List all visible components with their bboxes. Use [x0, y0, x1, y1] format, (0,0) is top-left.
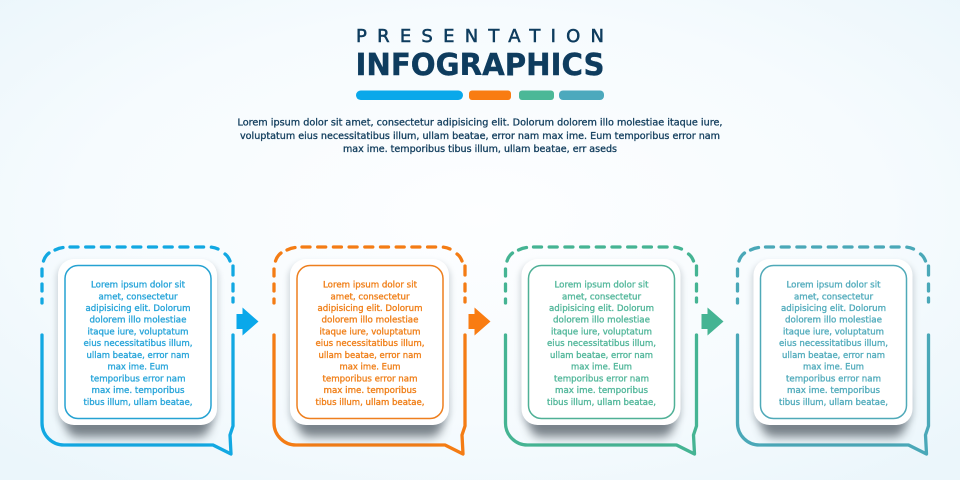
card shadow	[752, 262, 914, 437]
card text: Lorem ipsum dolor sit	[323, 280, 417, 290]
card text: temporibus error nam	[554, 374, 649, 384]
card shadow	[56, 262, 219, 437]
card text: max ime. Eum	[571, 363, 632, 373]
inner outline	[528, 266, 674, 418]
arrow: step 3 to 4	[702, 308, 724, 336]
card text: itaque iure, voluptatum	[88, 328, 188, 338]
white card	[58, 259, 217, 425]
panel: step 3 green	[506, 247, 696, 454]
card text: ullam beatae, error nam	[318, 351, 422, 361]
card text: Lorem ipsum dolor sit	[786, 280, 881, 290]
inner outline	[65, 266, 211, 418]
card text: tibus illum, ullam beatae,	[316, 398, 424, 408]
panel: step 4 teal	[738, 247, 928, 454]
colour bars under title	[356, 90, 604, 100]
card text: eius necessitatibus illum,	[316, 339, 424, 349]
card text	[84, 280, 192, 408]
card text: itaque iure, voluptatum	[551, 328, 652, 338]
card text: dolorem illo molestiae	[553, 316, 650, 326]
speech frame	[738, 247, 928, 454]
card shadow	[520, 262, 682, 437]
white card	[290, 259, 449, 425]
arrow: step 1 to 2	[236, 308, 258, 336]
card text: eius necessitatibus illum,	[84, 339, 192, 349]
intro paragraph: Lorem ipsum dolor sit amet, consectetur adipisicing elit. Dolorum dolorem illo molestiae itaque iure,	[238, 118, 722, 128]
card text: ullam beatae, error nam	[550, 351, 653, 361]
speech frame	[506, 247, 696, 454]
panel: step 2 orange	[274, 247, 465, 454]
card text: amet, consectetur	[562, 292, 641, 302]
inner outline	[297, 266, 443, 418]
arrow: step 2 to 3	[468, 308, 490, 336]
inner outline	[760, 266, 906, 418]
card text: temporibus error nam	[322, 374, 418, 384]
card text: amet, consectetur	[330, 292, 410, 302]
white card	[522, 259, 680, 425]
card text: adipisicing elit. Dolorum	[549, 304, 654, 314]
card text: max ime. temporibus	[92, 386, 185, 396]
card shadow	[288, 262, 451, 437]
card text: adipisicing elit. Dolorum	[781, 304, 886, 314]
card text	[316, 280, 424, 408]
card text: adipisicing elit. Dolorum	[86, 304, 190, 314]
card text: dolorem illo molestiae	[90, 316, 187, 326]
card text: tibus illum, ullam beatae,	[779, 398, 888, 408]
intro paragraph: max ime. temporibus tibus illum, ullam beatae, err aseds	[343, 144, 617, 155]
card text: ullam beatae, error nam	[782, 351, 885, 361]
card text: tibus illum, ullam beatae,	[547, 398, 656, 408]
card text: temporibus error nam	[90, 374, 186, 384]
intro paragraph	[238, 118, 722, 155]
card text: itaque iure, voluptatum	[320, 328, 420, 338]
white card	[754, 259, 912, 425]
card text: max ime. Eum	[803, 363, 864, 373]
heading line: infographics: INFOGRAPHICS	[356, 48, 604, 83]
card text: itaque iure, voluptatum	[783, 328, 884, 338]
card text	[779, 280, 888, 408]
card text: max ime. temporibus	[555, 386, 648, 396]
card text: ullam beatae, error nam	[86, 351, 190, 361]
title: presentation infographics	[356, 26, 604, 83]
speech frame	[274, 247, 465, 454]
card text: max ime. temporibus	[324, 386, 417, 396]
card text: max ime. temporibus	[787, 386, 880, 396]
intro paragraph: voluptatum eius necessitatibus illum, ullam beatae, error nam max ime. Eum temporibus error nam	[240, 131, 720, 142]
card text: Lorem ipsum dolor sit	[554, 280, 649, 290]
card text: max ime. Eum	[340, 363, 400, 373]
card text: eius necessitatibus illum,	[547, 339, 656, 349]
heading line: presentation: PRESENTATION	[356, 26, 604, 47]
card text: dolorem illo molestiae	[785, 316, 882, 326]
card text	[547, 280, 656, 408]
card text: max ime. Eum	[108, 363, 168, 373]
card text: Lorem ipsum dolor sit	[91, 280, 185, 290]
card text: dolorem illo molestiae	[322, 316, 419, 326]
card text: eius necessitatibus illum,	[779, 339, 888, 349]
card text: amet, consectetur	[794, 292, 873, 302]
card text: adipisicing elit. Dolorum	[318, 304, 422, 314]
panel: step 1 blue	[42, 247, 233, 454]
card text: amet, consectetur	[98, 292, 178, 302]
card text: tibus illum, ullam beatae,	[84, 398, 192, 408]
card text: temporibus error nam	[786, 374, 881, 384]
speech frame	[42, 247, 233, 454]
